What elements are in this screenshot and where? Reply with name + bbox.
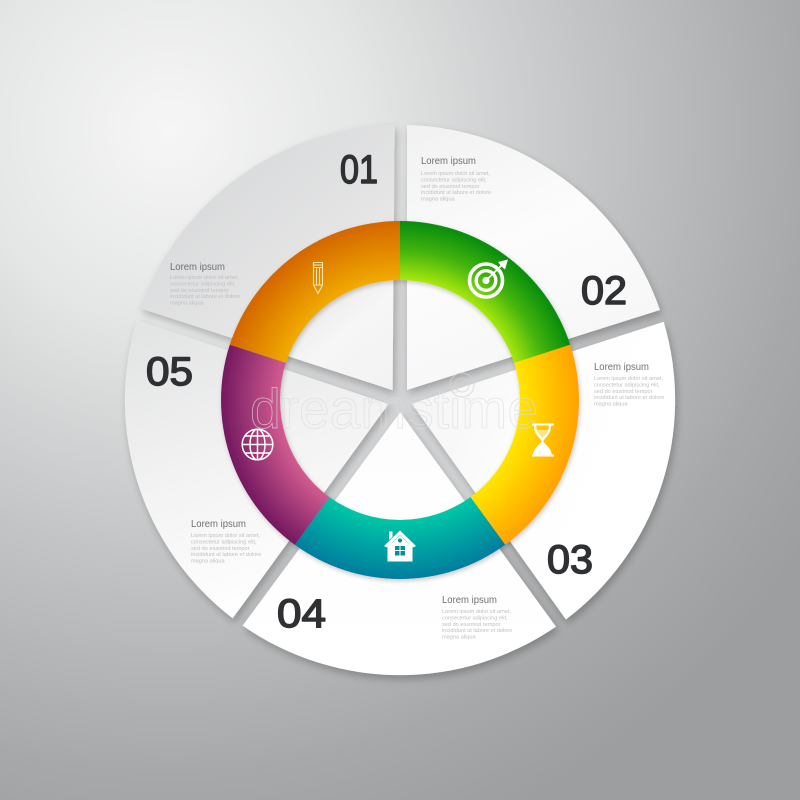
text block 05: consectetur adipiscing elit, [191, 540, 257, 546]
icon: globe [242, 429, 273, 460]
text block 01: magna aliqua [170, 300, 204, 306]
icon: target with arrow [470, 260, 508, 297]
panel: segment 04 [243, 412, 556, 675]
text block 05: incididunt ut labore et dolore [191, 552, 261, 558]
number 05: 05 [146, 350, 193, 394]
segment 05 shape [125, 320, 388, 618]
ring segment: purple [221, 345, 330, 545]
text block 01: consectetur adipiscing elit, [170, 282, 236, 288]
text block 04: sed do eiusmod tempor [442, 622, 501, 628]
watermark: dreamstime [250, 377, 538, 440]
text block 02: magna aliqua [421, 196, 455, 202]
text block 01: sed do eiusmod tempor [170, 288, 229, 294]
text block 02: consectetur adipiscing elit, [421, 178, 487, 184]
icon: pencil [314, 262, 322, 294]
segment 02 shape [407, 125, 660, 390]
text block 03: Lorem ipsum [594, 362, 649, 373]
text block 05: Lorem ipsum dolor sit amet, [191, 533, 260, 539]
panel: segment 05 [125, 320, 388, 618]
text block 04: magna aliqua [442, 634, 476, 640]
text block 03: magna aliqua [594, 402, 628, 408]
text block 02: incididunt ut labore et dolore [421, 190, 491, 196]
colour ring [221, 221, 579, 579]
ring segment: yellow [470, 345, 579, 545]
text block 05 [191, 519, 261, 564]
text block 04: Lorem ipsum dolor sit amet, [442, 609, 511, 615]
text block 04: Lorem ipsum [442, 595, 497, 606]
panel: segment 03 [412, 322, 675, 620]
text block 03 [594, 362, 664, 408]
text block 03: Lorem ipsum dolor sit amet, [594, 376, 663, 382]
text block 03: consectetur adipiscing elit, [594, 382, 660, 388]
segment 04 shape [243, 412, 556, 675]
text block 04: incididunt ut labore et dolore [442, 628, 512, 634]
number 04: 04 [277, 592, 326, 636]
segment 01 shape [141, 125, 395, 390]
number 03: 03 [547, 538, 593, 582]
text block 02 [421, 156, 491, 202]
text block 04 [442, 595, 512, 640]
central gap shading [265, 265, 535, 535]
panel: segment 01 [141, 125, 395, 390]
text block 02: Lorem ipsum [421, 156, 476, 167]
text block 01 [170, 262, 240, 306]
ring segment: green [400, 221, 570, 363]
text block 01: Lorem ipsum [170, 262, 225, 273]
ring segment: teal [295, 497, 505, 579]
panel: segment 02 [407, 125, 660, 390]
text block 02: sed do eiusmod tempor [421, 184, 480, 190]
icon: hourglass [532, 424, 554, 456]
text block 05: sed do eiusmod tempor [191, 546, 250, 552]
text block 03: incididunt ut labore et dolore [594, 395, 664, 401]
number 02: 02 [581, 269, 627, 313]
icon: house [384, 530, 416, 562]
ring segment: orange [230, 221, 400, 363]
text block 03: sed do eiusmod tempor [594, 389, 653, 395]
text block 01: incididunt ut labore et dolore [170, 294, 240, 300]
text block 02: Lorem ipsum dolor sit amet, [421, 171, 490, 177]
text block 01: Lorem ipsum dolor sit amet, [170, 275, 239, 281]
text block 04: consectetur adipiscing elit, [442, 616, 508, 622]
text block 05: magna aliqua [191, 558, 225, 564]
number 01: 01 [340, 148, 378, 192]
segment 03 shape [412, 322, 675, 620]
text block 05: Lorem ipsum [191, 519, 246, 530]
